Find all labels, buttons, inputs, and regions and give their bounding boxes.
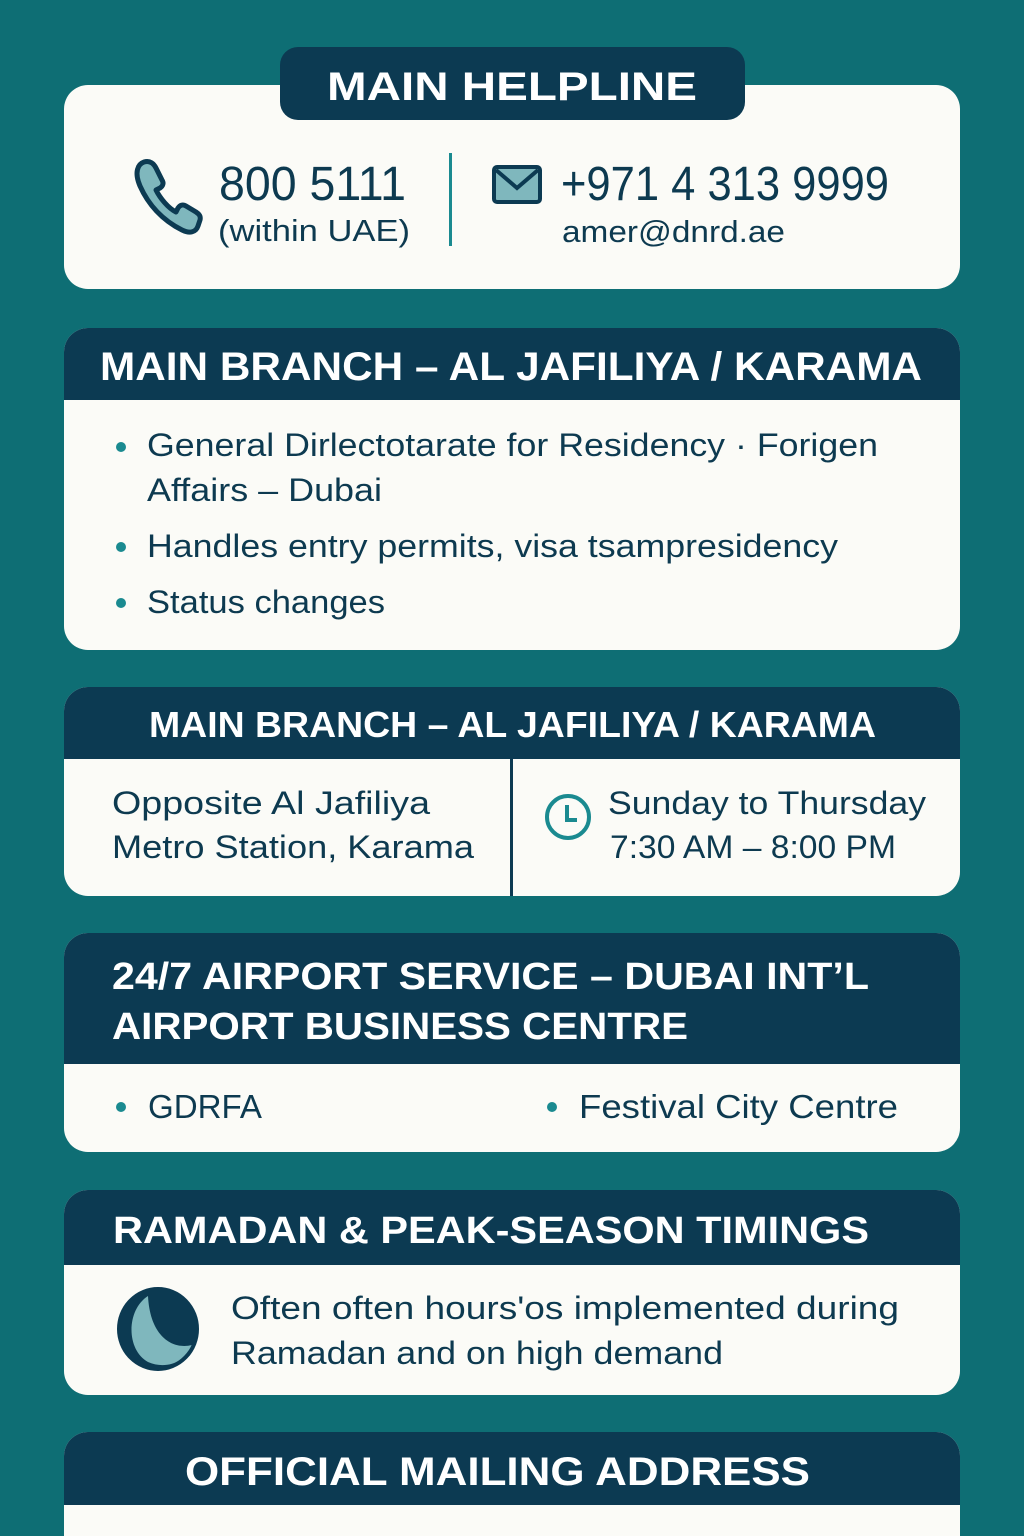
text: toll free number: 800 5111 [219,158,406,211]
text: address: Opposite Al Jafiliya [112,785,430,821]
panel: location and hours [64,687,960,896]
icon: crescent moon [119,1289,197,1369]
icon: phone [137,161,200,232]
bullet list: services: General Dirlectotarate for Residency · Forigen [147,427,878,463]
text: opening hours [608,785,926,865]
text: international number and email [561,158,889,249]
bullet list: services: Affairs – Dubai [147,472,382,508]
panel: main branch services [64,328,960,650]
icon: clock [547,796,589,838]
heading: main branch: MAIN BRANCH – AL JAFILIYA / KARAMA [100,345,922,389]
heading: airport service: 24/7 AIRPORT SERVICE – DUBAI INT’L [112,956,869,998]
bullet list: services [116,427,878,620]
text: international number and email: +971 4 313 9999 [561,158,889,211]
heading: mailing address: OFFICIAL MAILING ADDRESS [185,1450,810,1494]
icon: envelope [494,167,540,202]
panel: ramadan timings [64,1190,960,1395]
text: ramadan note: Often often hours'os implemented during [231,1290,899,1326]
text: toll free number [218,158,410,248]
text: international number and email: amer@dnrd.ae [562,214,785,249]
text: address: Metro Station, Karama [112,829,474,865]
bullet list: airport: GDRFA [148,1088,262,1125]
text: ramadan note: Ramadan and on high demand [231,1335,723,1371]
bullet list: airport [116,1088,898,1125]
text: ramadan note [231,1290,899,1371]
panel: main helpline [64,47,960,289]
bullet list: services: Status changes [147,584,385,620]
text: opening hours: 7:30 AM – 8:00 PM [610,829,896,865]
text: toll free number: (within UAE) [218,213,410,248]
text: opening hours: Sunday to Thursday [608,785,926,821]
heading: main branch location: MAIN BRANCH – AL JAFILIYA / KARAMA [149,704,876,745]
panel: airport service [64,933,960,1152]
heading: airport service: AIRPORT BUSINESS CENTRE [112,1006,688,1048]
bullet list: services: Handles entry permits, visa tsampresidency [147,528,838,564]
heading: airport service [112,956,869,1048]
panel: official mailing address [64,1432,960,1536]
heading pill: main helpline [280,47,745,120]
bullet list: airport: Festival City Centre [579,1088,898,1125]
heading pill: main helpline: MAIN HELPLINE [327,65,697,109]
heading: ramadan: RAMADAN & PEAK-SEASON TIMINGS [113,1210,869,1252]
text: address [112,785,474,865]
